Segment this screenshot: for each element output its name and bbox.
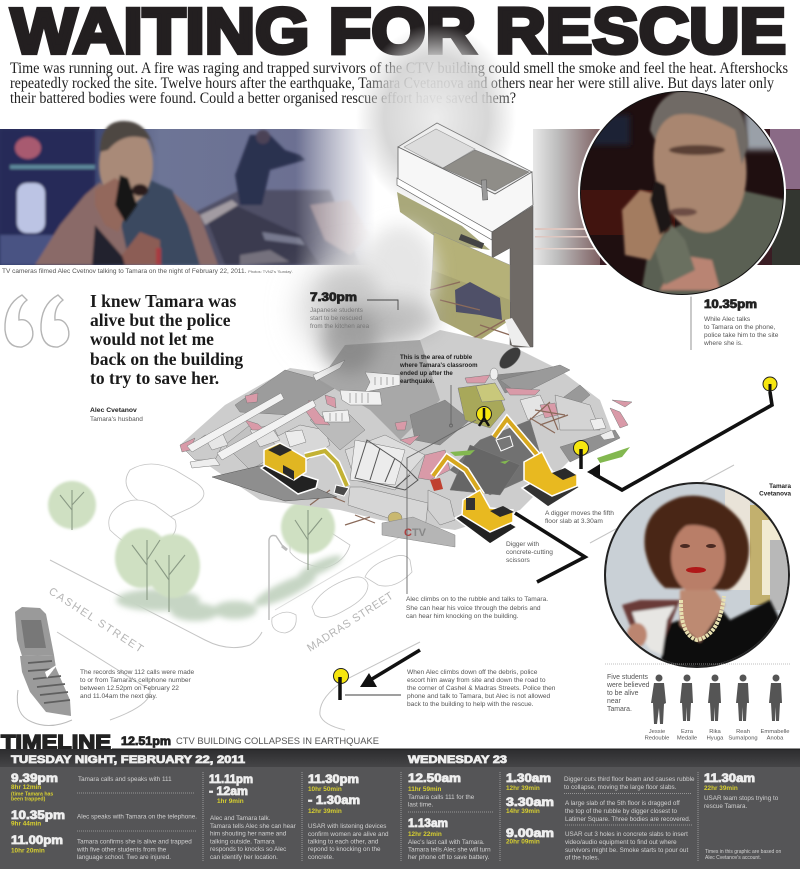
photo: Tamara Cvetanova	[600, 480, 795, 670]
car outlines	[109, 464, 412, 633]
timeline column: 12.50am: 11hr 59min	[408, 786, 441, 793]
timeline heading	[1, 732, 379, 754]
timeline heading: TIMELINE	[1, 732, 111, 754]
quote attribution: Alec Cvetanov	[90, 407, 137, 414]
timeline column: 12.50am: last time.	[408, 802, 433, 808]
black arrow: police take Alec to the site	[587, 392, 772, 490]
timeline column: evening events: Tamara confirms she is alive and trapped	[77, 838, 192, 846]
icon: flip phone	[15, 607, 72, 726]
timeline column: 11.11pm: Alec and Tamara talk.	[210, 815, 271, 822]
timeline column: 11.11pm	[209, 774, 296, 861]
annotation: digger moves slab	[545, 510, 614, 525]
street label: Cashel Street: CASHEL STREET	[46, 585, 145, 656]
darker smoke layer	[320, 270, 440, 374]
photo label: Tamara Cvetanova: Tamara	[769, 483, 791, 490]
annotation: classroom rubble: where Tamara's classroom	[399, 362, 478, 369]
timeline column: 11.11pm: - 12am	[209, 786, 248, 798]
student names: Reah	[736, 729, 750, 735]
annotation: 10.35pm: police take him to the site	[704, 332, 779, 339]
timeline column: 11.11pm: 1hr 9min	[217, 798, 244, 805]
timeline column: 11.30am: Times in this graphic are based on	[705, 849, 781, 855]
annotation: phone records: to or from Tamara's cellphone number	[80, 677, 192, 684]
digger left	[212, 443, 349, 501]
timeline column: 11.30am: rescue Tamara.	[704, 803, 748, 810]
satellite dish	[496, 344, 524, 372]
students panel	[605, 664, 791, 742]
annotation: Alec climbs: Alec climbs on to the rubble and talks to Tamara.	[406, 596, 548, 603]
annotation: digger with scissors: Digger with	[506, 541, 539, 548]
window frame	[355, 440, 418, 490]
intro text	[10, 60, 788, 107]
cutaway building	[397, 123, 533, 347]
timeline column: 12.50am: 12hr 22min	[408, 831, 442, 838]
olive interior floors	[432, 232, 510, 302]
annotation: digger moves slab: A digger moves the fifth	[545, 510, 614, 517]
annotation: Alec escorted away: back to the building to help with the rescue.	[407, 701, 534, 708]
students caption: were believed	[606, 682, 650, 689]
student names	[645, 729, 790, 742]
annotation: Alec climbs: can hear him knocking on the building.	[406, 613, 519, 620]
timeline column: 11.30pm	[308, 774, 389, 861]
timeline heading: 12.51pm	[121, 736, 171, 748]
annotation: classroom rubble: This is the area of rubble	[400, 354, 473, 361]
annotation: digger with scissors	[506, 541, 553, 564]
pull quote: would not let me	[90, 329, 214, 349]
timeline column: 12.50am: Tamara tells Alec she will turn	[408, 846, 491, 854]
annotation: 10.35pm: 10.35pm	[704, 299, 757, 311]
annotation: digger moves slab: floor slab at 3.30am	[545, 518, 603, 525]
annotation: digger with scissors: scissors	[506, 557, 531, 564]
intro text: their battered bodies were found. Could a better organised rescue effort have saved them?	[10, 90, 516, 107]
building walls	[398, 147, 533, 232]
timeline column: evening events: 9.39pm	[11, 773, 58, 785]
digger with concrete-cutting scissors	[430, 457, 517, 544]
annotation: 10.35pm: While Alec talks	[704, 316, 751, 323]
annotation: classroom rubble	[399, 354, 478, 385]
timeline column: evening events: 10.35pm	[11, 810, 65, 822]
quote attribution	[90, 407, 143, 423]
students caption: Five students	[607, 674, 649, 681]
student silhouettes	[651, 674, 782, 724]
timeline column: evening events: (time Tamara has	[11, 792, 53, 798]
marker: Alec near digger	[574, 440, 588, 469]
pull quote: back on the building	[90, 349, 243, 369]
timeline column: evening events	[11, 773, 197, 861]
timeline column: 1.30am to 9.00am: 3.30am	[506, 797, 554, 809]
timeline column: evening events: been trapped)	[11, 796, 46, 802]
timeline column: evening events: language school. Two are injured.	[77, 854, 171, 861]
student names: Emmabelle	[760, 729, 790, 735]
head of Alec, breaking the photo frame	[95, 121, 155, 232]
annotation: 7.30pm: 7.30pm	[310, 292, 357, 304]
timeline column: 11.11pm: him shouting her name and	[210, 830, 287, 838]
annotation: Alec escorted away: phone and talk to Tamara, but Alec is not allowed	[407, 693, 551, 700]
timeline column: 1.30am to 9.00am: of the holes.	[565, 854, 600, 862]
quotation marks	[5, 295, 69, 347]
timeline column: 11.30pm: concrete.	[308, 854, 334, 861]
collapsed staircases	[322, 372, 400, 422]
pull quote: to try to save her.	[90, 368, 219, 388]
timeline column: 1.30am to 9.00am: A large slab of the 5th floor is dragged off	[565, 800, 680, 807]
annotation: Alec escorted away: escort him away from site and down the road to	[407, 677, 546, 684]
student names: Rika	[709, 729, 722, 735]
timeline column: 1.30am to 9.00am: 20hr 09min	[506, 838, 540, 846]
annotation: phone records: and 11.04am the next day.	[80, 693, 157, 700]
timeline column: evening events: Tamara calls and speaks with 111	[78, 776, 172, 783]
timeline panel	[0, 748, 800, 869]
student names: Sumalpong	[728, 736, 758, 742]
timeline column: 1.30am to 9.00am: Latimer Square. Three bodies are recovered.	[565, 816, 691, 823]
annotation: 10.35pm: where she is.	[703, 340, 743, 347]
pull quote	[90, 291, 243, 388]
timeline column: evening events: 8hr 12min	[11, 784, 41, 791]
roof	[398, 123, 532, 194]
timeline column: 11.30pm: repond to knocking on the	[308, 846, 381, 853]
annotation: 7.30pm: start to be rescued	[310, 315, 363, 322]
thin leader lines	[345, 296, 691, 695]
timeline column: 11.30am: 22hr 39min	[704, 785, 738, 792]
background streets and cars	[50, 464, 734, 730]
timeline column: 11.30am: Alec Cvetanov's account.	[705, 855, 761, 861]
annotation: 7.30pm: from the kitchen area	[310, 323, 370, 330]
timeline column: 1.30am to 9.00am: survivors might be. Smoke starts to pour out	[565, 847, 688, 854]
digger moving the fifth floor slab	[494, 419, 580, 507]
timeline column: 11.30pm: 12hr 39min	[308, 808, 342, 815]
timeline column: 12.50am: Tamara calls 111 for the	[408, 794, 475, 801]
timeline column: 11.11pm: can identify her location.	[210, 854, 278, 861]
timeline column: 11.30pm: confirm women are alive and	[308, 831, 389, 838]
annotation: phone records: The records show 112 calls were made	[80, 669, 195, 676]
annotation: phone records: between 12.52pm on February 22	[80, 685, 179, 692]
timeline column: 1.30am to 9.00am: 12hr 39min	[506, 785, 540, 792]
timeline column: 1.30am to 9.00am: 14hr 39min	[506, 808, 540, 815]
marker: Alec at top right	[763, 377, 777, 394]
annotation: digger with scissors: concrete-cutting	[506, 549, 553, 556]
timeline column: 11.30pm: talking to each other, and	[308, 838, 379, 846]
timeline column: 1.30am to 9.00am: Digger cuts third floor beam and causes rubble	[564, 776, 695, 783]
rubble pile	[180, 330, 632, 530]
annotation: 10.35pm: to Tamara on the phone,	[704, 324, 776, 331]
heading: Wednesday 23: WEDNESDAY 23	[408, 754, 507, 766]
photo label: Tamara Cvetanova	[759, 483, 791, 498]
timeline column: 11.30am: USAR team stops trying to	[704, 795, 779, 802]
timeline column: 1.30am to 9.00am: 9.00am	[506, 828, 554, 840]
annotation: phone records	[80, 669, 195, 700]
timeline column: evening events: 10hr 20min	[11, 848, 45, 854]
student names: Hyuga	[707, 736, 724, 742]
timeline column: 12.50am: her phone off to save battery.	[408, 854, 490, 861]
timeline column: 11.30pm: 10hr 50min	[308, 786, 342, 793]
pull quote: alive but the police	[90, 310, 231, 330]
annotation: Alec escorted away: the corner of Cashel & Madras Streets. Police then	[407, 685, 556, 692]
trees	[48, 481, 344, 621]
annotation: Alec escorted away	[407, 669, 556, 708]
annotation: Alec climbs	[406, 596, 548, 620]
students caption	[606, 674, 650, 713]
students caption: to be alive	[607, 690, 639, 697]
timeline column: evening events: 11.00pm	[11, 835, 63, 847]
CTV sign: CTV	[404, 527, 427, 539]
timeline column: 11.30am	[704, 773, 781, 861]
student names: Redouble	[645, 736, 669, 742]
annotation: classroom rubble: ended up after the	[400, 370, 453, 377]
timeline column: 1.30am to 9.00am: to collapse, moving the large floor slabs.	[564, 784, 677, 791]
timeline column: 1.30am to 9.00am: video/audio equipment to find out where	[565, 839, 677, 846]
annotation: 10.35pm	[703, 299, 779, 347]
marker: Alec at street corner	[334, 668, 348, 700]
student names: Anoba	[767, 736, 784, 742]
timeline column: 1.30am to 9.00am	[506, 773, 695, 862]
students caption: near	[607, 698, 621, 705]
timeline column: evening events: with five other students from the	[76, 846, 167, 854]
photo: Alec on the phone	[575, 88, 790, 300]
timeline column: 1.30am to 9.00am: USAR cut 3 holes in concrete slabs to insert	[565, 831, 688, 838]
smoke behind building	[356, 24, 800, 265]
structural column	[492, 206, 533, 347]
timeline column: evening events: Alec speaks with Tamara on the telephone.	[77, 814, 197, 820]
marker: Alec on the rubble	[476, 406, 492, 426]
student names: Medalle	[677, 736, 697, 742]
street label: Madras Street: MADRAS STREET	[305, 590, 396, 655]
timeline column: 12.50am: 12.50am	[408, 773, 461, 785]
timeline heading: CTV BUILDING COLLAPSES IN EARTHQUAKE	[176, 736, 379, 747]
timeline column: 12.50am: 1.13am	[408, 818, 448, 830]
student names: Ezra	[681, 729, 694, 735]
street lamp	[269, 536, 287, 620]
photo label: Tamara Cvetanova: Cvetanova	[759, 490, 791, 498]
timeline column: 1.30am to 9.00am: 1.30am	[506, 773, 551, 785]
timeline column: 1.30am to 9.00am: the top of the rubble by digger closest to	[565, 808, 678, 815]
long concrete beams	[187, 393, 284, 452]
timeline column: 11.30pm: 11.30pm	[308, 774, 359, 786]
pink insulation pieces	[180, 375, 632, 480]
timeline column: 11.30pm: USAR with listening devices	[308, 823, 386, 830]
timeline column: 11.11pm: 11.11pm	[209, 774, 253, 786]
photo: Alec at the rubble on TV	[0, 121, 400, 265]
timeline column: 12.50am	[408, 773, 491, 861]
annotation: Alec climbs: She can hear his voice through the debris and	[406, 605, 541, 612]
timeline column: 11.11pm: responds to knocks so Alec	[210, 846, 286, 853]
timeline column: 12.50am: Alec's last call with Tamara.	[408, 839, 485, 846]
tangled reinforcing steel	[310, 402, 568, 525]
annotation: 7.30pm: Japanese students	[310, 307, 363, 314]
annotation: Alec escorted away: When Alec climbs down off the debris, police	[407, 669, 538, 676]
green fragments	[450, 447, 630, 464]
CTV sign	[382, 517, 455, 547]
timeline column: 11.11pm: talking outside. Tamara	[210, 838, 275, 846]
quote attribution: Tamara's husband	[90, 416, 143, 423]
black arrow: police escort Alec away	[360, 513, 585, 687]
annotation: 7.30pm	[310, 292, 370, 330]
timeline column: 11.11pm: Tamara tells Alec she can hear	[210, 823, 296, 830]
timeline column: 11.30am: 11.30am	[704, 773, 755, 785]
timeline column: 11.30pm: - 1.30am	[308, 795, 360, 807]
heading: Tuesday night: TUESDAY NIGHT, FEBRUARY 22, 2011	[11, 754, 245, 766]
student names: Jessie	[649, 729, 665, 735]
timeline column: evening events: 9hr 44min	[11, 820, 41, 828]
photo caption: TV cameras filmed Alec Cvetnov talking to Tamara on the night of February 22, 2011. Photos: TVNZ's 'Sunday'.	[2, 268, 293, 275]
annotation: classroom rubble: earthquake.	[400, 378, 435, 385]
pull quote: I knew Tamara was	[90, 291, 237, 311]
students caption: Tamara.	[607, 706, 632, 713]
smoke over rubble	[300, 225, 435, 360]
